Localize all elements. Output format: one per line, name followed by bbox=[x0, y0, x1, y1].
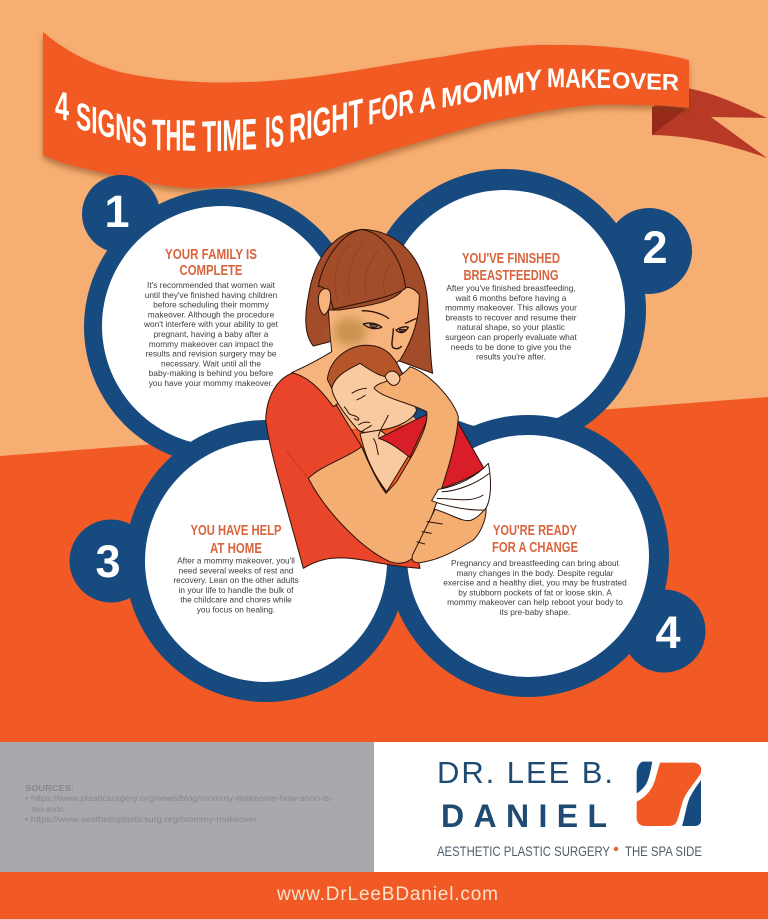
panel 3 text: recovery. Lean on the other adults bbox=[173, 575, 299, 585]
baby head bbox=[332, 358, 417, 432]
footer: logo panel: DANIEL bbox=[441, 798, 607, 834]
illustration: mother holding baby bbox=[266, 229, 491, 568]
panel 1 text: makeover. Although the procedure bbox=[148, 309, 275, 319]
panel 1 text: mommy makeover can impact the bbox=[149, 339, 274, 349]
baby ear bbox=[385, 371, 400, 385]
shirt fold bbox=[287, 452, 308, 478]
woman arm and hand bbox=[308, 367, 458, 563]
panel 3 text bbox=[173, 523, 299, 614]
panel 2 text: After you've finished breastfeeding, bbox=[446, 283, 576, 293]
woman lower hand bbox=[412, 508, 486, 563]
footer: sources panel bbox=[0, 742, 374, 872]
title bbox=[55, 63, 679, 162]
panel 3 text: After a mommy makeover, you'll bbox=[177, 556, 295, 566]
baby face lines bbox=[344, 388, 388, 455]
footer: sources panel: SOURCES: bbox=[25, 784, 74, 793]
title: IS bbox=[265, 107, 284, 158]
panel 1 text: won't interfere with your ability to get bbox=[143, 319, 279, 329]
panel 1 text: It's recommended that women wait bbox=[147, 280, 276, 290]
panel 1 text: results and revision surgery may be bbox=[146, 349, 277, 359]
blue rings lower bbox=[70, 415, 706, 702]
panel 1 text: before scheduling their mommy bbox=[153, 300, 270, 310]
footer: website bar bbox=[0, 872, 768, 919]
banner ribbon bbox=[43, 32, 689, 188]
title: SIGNS bbox=[76, 95, 147, 157]
title: A bbox=[419, 80, 436, 121]
panel 4 text: FOR A CHANGE bbox=[492, 540, 578, 556]
number 1: 1 bbox=[104, 186, 130, 237]
title: RIGHT bbox=[289, 89, 363, 152]
eyes and brows bbox=[362, 311, 417, 349]
logo mark bbox=[637, 762, 701, 826]
footer: sources panel: too-soon bbox=[32, 805, 64, 814]
number 2: 2 bbox=[642, 222, 668, 273]
hair strands bbox=[335, 242, 390, 300]
panel 3 text: in your life to handle the bulk of bbox=[179, 585, 294, 595]
title: FOR bbox=[368, 81, 414, 133]
panel 2 text: BREASTFEEDING bbox=[464, 268, 558, 284]
title: TIME bbox=[202, 110, 257, 162]
panel 2 text bbox=[445, 251, 577, 362]
title: MOMMY bbox=[441, 63, 542, 114]
panel 3 text: the childcare and chores while bbox=[180, 595, 292, 605]
number 3: 3 bbox=[95, 536, 121, 587]
footer: logo panel: DR. LEE B. bbox=[437, 755, 613, 790]
panel 1 and 2 white circles bbox=[102, 190, 625, 446]
panel 4 text: YOU'RE READY bbox=[493, 523, 577, 539]
panel 2 text: surgeon can properly evaluate what bbox=[445, 332, 577, 342]
panel 1 text: pregnant, having a baby after a bbox=[154, 329, 269, 339]
footer: sources panel: • https://www.aestheticplasticsurg.org/mommy-makeover bbox=[25, 815, 257, 824]
neck shadow bbox=[333, 318, 367, 346]
footer: logo panel bbox=[374, 742, 768, 872]
footer: logo panel: AESTHETIC PLASTIC SURGERY bbox=[437, 843, 611, 859]
baby chest bbox=[360, 430, 410, 492]
title: 4 bbox=[55, 81, 69, 130]
woman neck and face bbox=[292, 287, 419, 407]
panel 2 text: results you're after. bbox=[476, 352, 546, 362]
diaper bbox=[432, 463, 491, 510]
panel 4 text: Pregnancy and breastfeeding can bring about bbox=[451, 558, 620, 568]
woman shirt bbox=[266, 372, 420, 568]
panel 1 text: COMPLETE bbox=[180, 263, 243, 279]
panel 1 text: baby-making is behind you before bbox=[149, 368, 274, 378]
panel 2 text: YOU'VE FINISHED bbox=[462, 251, 560, 267]
panel 2 text: needs to be done to give you the bbox=[451, 342, 572, 352]
title: MAKE bbox=[547, 63, 611, 94]
panel 4 text bbox=[443, 523, 627, 617]
baby hair bbox=[327, 345, 407, 388]
panel 2 text: mommy makeover. This allows your bbox=[445, 303, 577, 313]
panel 2 text: natural shape, so your plastic bbox=[457, 322, 565, 332]
baby shirt red bbox=[378, 413, 430, 457]
panel 1 text: you have your mommy makeover. bbox=[149, 378, 273, 388]
panel 3 text: AT HOME bbox=[210, 541, 262, 557]
panel 1 text bbox=[143, 247, 279, 388]
footer: website bar: www.DrLeeBDaniel.com bbox=[276, 884, 498, 905]
panel 2 text: breasts to recover and resume their bbox=[446, 312, 577, 322]
back hair bbox=[306, 229, 433, 373]
blue rings and number badges bbox=[82, 169, 692, 465]
panel 3 text: you focus on healing. bbox=[197, 604, 275, 614]
footer: logo panel: THE SPA SIDE bbox=[625, 843, 702, 859]
panel 4 text: by stubborn pockets of fat or loose skin. A bbox=[458, 587, 612, 597]
panel 1 text: YOUR FAMILY IS bbox=[165, 247, 257, 263]
footer: sources panel: • https://www.plasticsurgery.org/news/blog/mommy-makeover-how-soon-is- bbox=[25, 794, 333, 803]
top hair bbox=[318, 229, 406, 309]
panel 2 text: wait 6 months before having a bbox=[455, 293, 567, 303]
title: THE bbox=[152, 111, 196, 161]
panel 4 text: mommy makeover can help reboot your body to bbox=[447, 597, 623, 607]
panel 3 text: need several weeks of rest and bbox=[179, 565, 294, 575]
title: OVER bbox=[612, 67, 679, 95]
panel 4 text: exercise and a healthy diet, you may be frustrated bbox=[443, 578, 627, 588]
panel 4 text: its pre-baby shape. bbox=[500, 607, 570, 617]
panel 1 text: necessary. Wait until all the bbox=[161, 358, 261, 368]
panel 3 text: YOU HAVE HELP bbox=[190, 523, 282, 539]
panel 4 text: many changes in the body. Despite regular bbox=[456, 568, 614, 578]
baby body red bbox=[430, 423, 484, 489]
panel 1 text: until they've finished having children bbox=[145, 290, 278, 300]
banner ribbon tail bbox=[652, 88, 767, 158]
panel 3 and 4 white circles bbox=[145, 435, 649, 682]
ear bbox=[318, 289, 331, 315]
number 4: 4 bbox=[655, 607, 681, 658]
irises bbox=[370, 324, 405, 332]
